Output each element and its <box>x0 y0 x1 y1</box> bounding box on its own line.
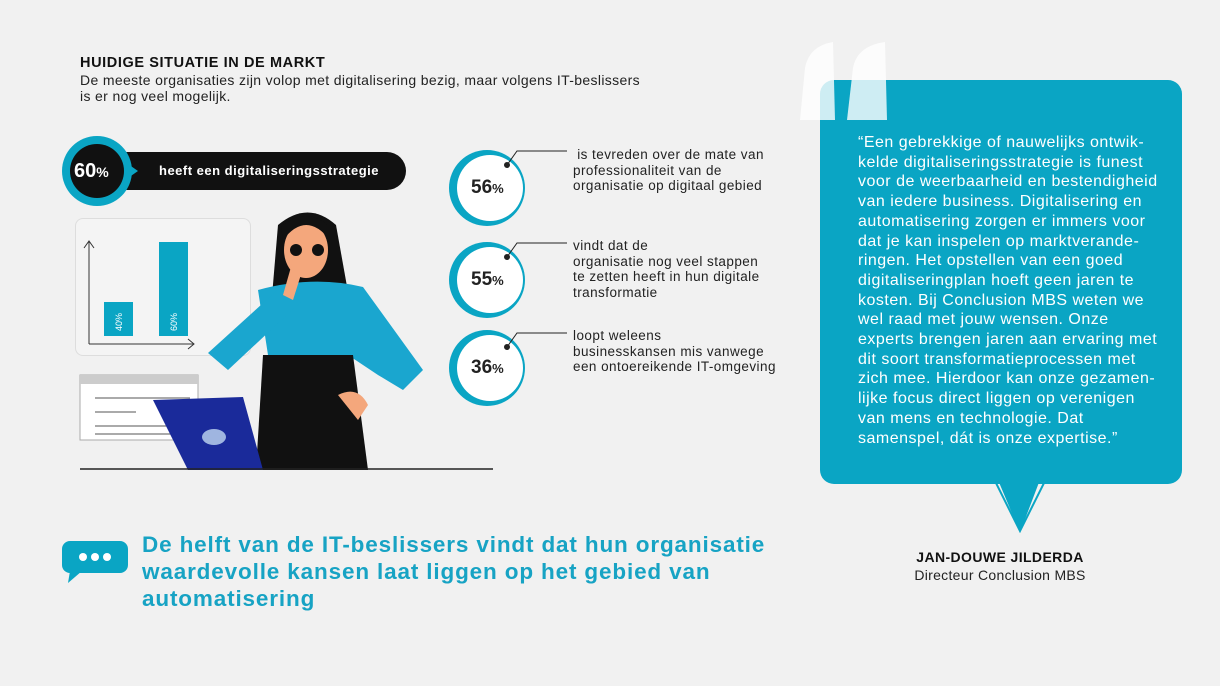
intro text <box>80 72 640 104</box>
quote box: digitaliseringplan hoeft geen jaren te <box>858 272 1134 289</box>
stat circles: een ontoereikende IT-omgeving <box>573 359 776 374</box>
quote tail <box>995 484 1045 533</box>
icon: quote marks <box>800 42 887 120</box>
conclusion text: automatisering <box>142 586 315 611</box>
quote box: zich mee. Hierdoor kan onze gezamen- <box>858 370 1155 387</box>
quote box <box>820 80 1182 484</box>
strategy bar 60%: heeft een digitaliseringsstrategie <box>159 163 379 178</box>
stat circles: 55% <box>471 269 504 290</box>
stat circles: transformatie <box>573 284 658 300</box>
quote box: “Een gebrekkige of nauwelijks ontwik- <box>858 134 1144 151</box>
author: JAN-DOUWE JILDERDA <box>916 549 1084 565</box>
stat circles: professionaliteit van de <box>573 162 722 178</box>
bar chart: 60% <box>169 313 179 331</box>
quote box: voor de weerbaarheid en bestendigheid <box>858 173 1158 190</box>
quote box: dit soort transformatieprocessen met <box>858 351 1136 368</box>
conclusion text <box>142 532 765 611</box>
quote box: kelde digitaliseringsstrategie is funest <box>858 154 1143 171</box>
illustration: woman with laptop <box>80 212 493 470</box>
quote box: samenspel, dát is onze expertise.” <box>858 430 1118 447</box>
strategy bar 60% <box>62 136 406 206</box>
quote box: experts brengen jaren aan ervaring met <box>858 331 1157 348</box>
stat circles: 56% <box>471 177 504 198</box>
quote box: automatisering zorgen er immers voor <box>858 213 1145 230</box>
stat circles: loopt weleens <box>573 328 661 343</box>
intro text: De meeste organisaties zijn volop met digitalisering bezig, maar volgens IT-beslissers <box>80 72 640 88</box>
quote box: ringen. Het opstellen van een goed <box>858 252 1123 269</box>
quote box: van mens en technologie. Dat <box>858 410 1084 427</box>
quote box: lijke focus direct liggen op verenigen <box>858 390 1135 407</box>
stat circles: organisatie nog veel stappen <box>573 254 758 268</box>
quote box: wel raad met jouw wensen. Onze <box>858 311 1109 328</box>
stat circles: vindt dat de <box>573 238 648 253</box>
stat circles <box>449 147 776 406</box>
stat circles: is tevreden over de mate van <box>577 147 764 162</box>
bar chart <box>75 218 251 356</box>
stat circles: 36% <box>471 357 504 378</box>
author <box>914 549 1086 583</box>
quote box: van iedere business. Digitalisering en <box>858 193 1142 210</box>
strategy bar 60%: 60% <box>74 160 109 182</box>
stat circles: businesskansen mis vanwege <box>573 344 764 358</box>
bar chart: 40% <box>114 313 124 331</box>
quote box: kosten. Bij Conclusion MBS weten we <box>858 292 1144 309</box>
quote box: dat je kan inspelen op marktverande- <box>858 233 1139 250</box>
stat circles: te zetten heeft in hun digitale <box>573 269 760 284</box>
stat circles: organisatie op digitaal gebied <box>573 178 762 193</box>
conclusion text: De helft van de IT-beslissers vindt dat hun organisatie <box>142 532 765 557</box>
icon: chat bubble <box>62 541 128 583</box>
heading: HUIDIGE SITUATIE IN DE MARKT <box>80 55 325 71</box>
conclusion text: waardevolle kansen laat liggen op het gebied van <box>142 559 710 584</box>
author: Directeur Conclusion MBS <box>914 567 1086 583</box>
intro text: is er nog veel mogelijk. <box>80 88 231 104</box>
